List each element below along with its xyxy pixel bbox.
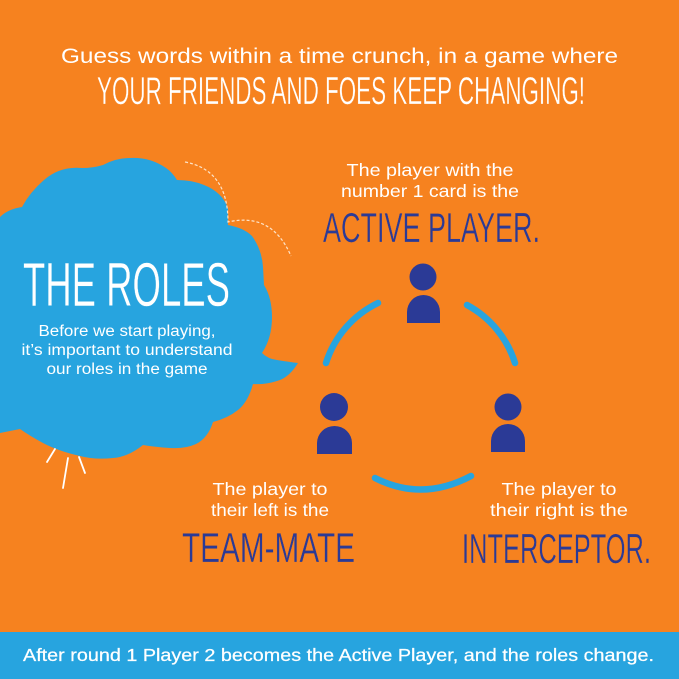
panel: interceptor label bbox=[462, 479, 651, 572]
roles description bbox=[22, 323, 232, 378]
panel: interceptor label: their right is the bbox=[490, 500, 628, 520]
icon: team-mate bbox=[317, 393, 352, 454]
panel: interceptor label: The player to bbox=[502, 479, 616, 499]
panel: the roles speech cloud bbox=[0, 158, 298, 488]
spark rays bbox=[47, 449, 85, 488]
panel: team-mate label bbox=[182, 479, 355, 571]
panel: active player label bbox=[323, 160, 540, 251]
panel: active player label: The player with the bbox=[346, 160, 514, 180]
roles description: it’s important to understand bbox=[22, 342, 232, 359]
cloud shape bbox=[0, 158, 298, 459]
panel: team-mate label: TEAM-MATE bbox=[182, 524, 355, 571]
roles description: our roles in the game bbox=[46, 361, 208, 378]
panel: team-mate label: their left is the bbox=[211, 500, 329, 520]
footer bar bbox=[0, 632, 679, 679]
roles title: THE ROLES bbox=[23, 251, 230, 320]
panel: active player label: number 1 card is the bbox=[341, 181, 519, 201]
intro line: Guess words within a time crunch, in a game where bbox=[61, 44, 618, 68]
dashed accent lines bbox=[185, 162, 291, 256]
panel: active player label: ACTIVE PLAYER. bbox=[323, 204, 540, 251]
panel: team-mate label: The player to bbox=[212, 479, 328, 499]
footer bar: After round 1 Player 2 becomes the Active Player, and the roles change. bbox=[23, 645, 654, 665]
roles description: Before we start playing, bbox=[38, 323, 216, 340]
diagram: player cycle bbox=[317, 264, 525, 490]
connecting arcs bbox=[326, 303, 515, 490]
icon: interceptor bbox=[491, 394, 525, 452]
icon: active player bbox=[407, 264, 440, 323]
